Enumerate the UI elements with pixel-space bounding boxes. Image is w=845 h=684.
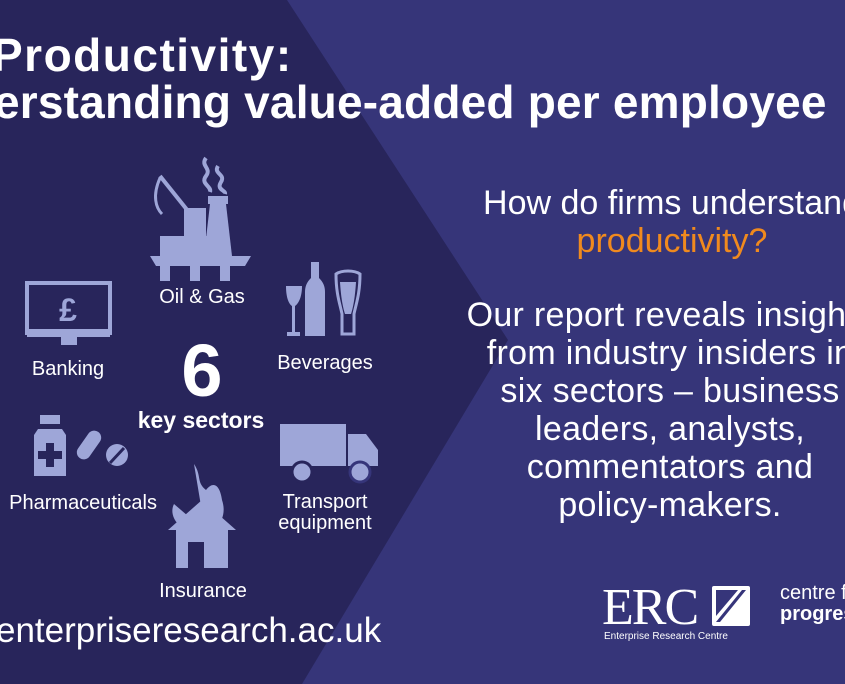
label: transport equipment: equipment — [278, 512, 372, 534]
label: transport equipment — [278, 491, 372, 534]
body text: policy-makers. — [558, 486, 782, 524]
website url: enterpriseresearch.ac.uk — [0, 611, 381, 650]
label: insurance: Insurance — [159, 580, 247, 602]
logo: ERC: Enterprise Research Centre — [604, 631, 728, 642]
label: transport equipment: Transport — [283, 491, 367, 513]
body text: leaders, analysts, — [535, 410, 805, 448]
subtitle: key sectors: key sectors — [138, 407, 264, 433]
icon: insurance house on fire — [168, 464, 236, 568]
label: oil & gas: Oil & Gas — [159, 286, 245, 308]
logo: centre for progressive capitalism — [780, 582, 845, 625]
icon: pharmaceuticals — [34, 415, 128, 476]
label: banking: Banking — [32, 358, 104, 380]
label: pharmaceuticals: Pharmaceuticals — [9, 492, 157, 514]
icon: banking monitor — [25, 281, 112, 345]
logo: ERC — [602, 579, 750, 642]
title: erstanding value-added per employee — [0, 76, 827, 128]
body text: six sectors – business — [500, 372, 840, 410]
icon: banking monitor: £ — [59, 292, 77, 328]
question text — [483, 184, 845, 260]
icon: truck — [280, 424, 378, 484]
icon: oil rig — [150, 156, 251, 281]
title: Productivity: — [0, 29, 293, 81]
body text: commentators and — [527, 448, 813, 486]
body text — [467, 296, 845, 524]
body text: from industry insiders in — [487, 334, 845, 372]
big number: 6 — [181, 329, 223, 412]
label: beverages: Beverages — [277, 352, 373, 374]
title — [0, 29, 827, 128]
logo: ERC: ERC — [602, 579, 697, 636]
question text: productivity? — [577, 222, 767, 260]
icon: beverages — [286, 262, 362, 336]
